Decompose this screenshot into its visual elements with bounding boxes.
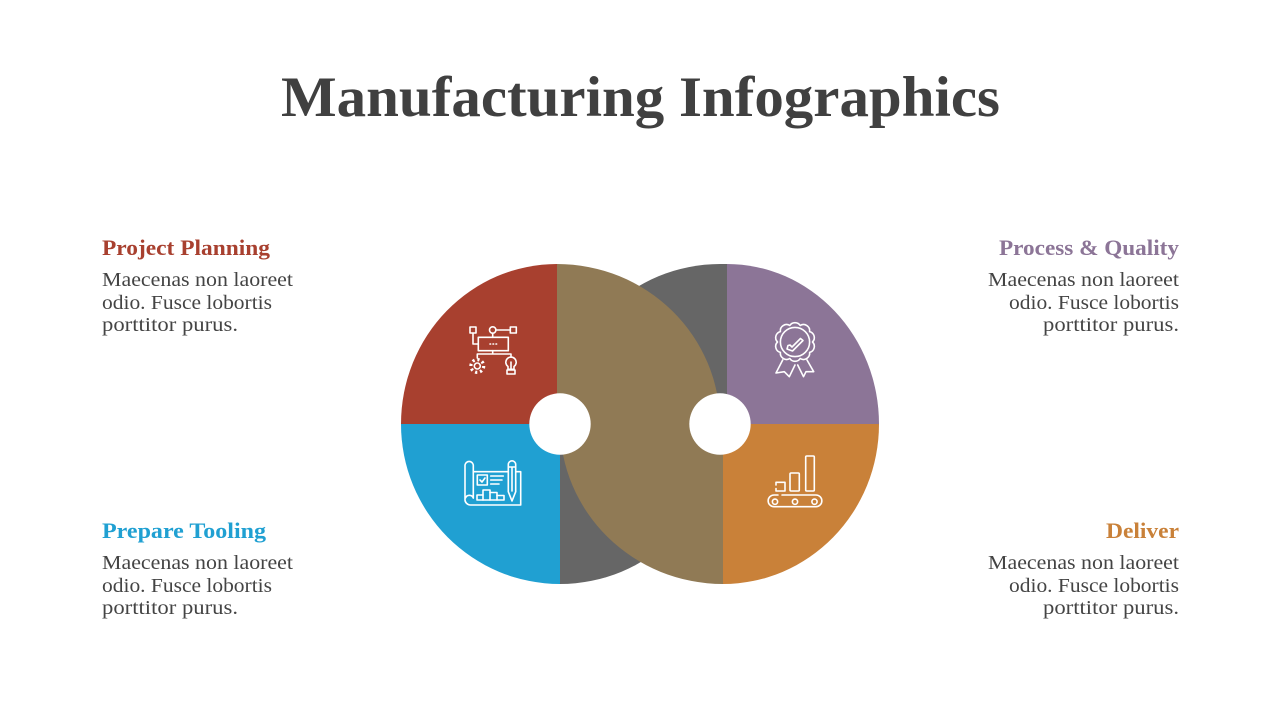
text block: Deliver xyxy=(988,518,1179,619)
segment: red xyxy=(401,264,557,424)
body: Process & Quality xyxy=(988,269,1179,336)
segment: orange xyxy=(723,424,879,584)
body: Deliver: Maecenas non laoreet xyxy=(988,552,1179,574)
text block: Prepare Tooling xyxy=(102,518,293,619)
heading: Prepare Tooling: Prepare Tooling xyxy=(102,518,266,543)
body: Prepare Tooling: porttitor purus. xyxy=(102,597,238,619)
body: Prepare Tooling: Maecenas non laoreet xyxy=(102,552,293,574)
segment: purple xyxy=(727,264,879,424)
heading: Project Planning: Project Planning xyxy=(102,235,270,260)
interlocking circles diagram xyxy=(401,264,879,584)
segment: blue xyxy=(401,424,560,584)
segment: grey top xyxy=(560,264,727,424)
body: Project Planning: porttitor purus. xyxy=(102,314,238,336)
body: Project Planning: Maecenas non laoreet xyxy=(102,269,293,291)
title: Manufacturing Infographics xyxy=(281,66,1000,129)
icon: conveyor belt with bars xyxy=(768,456,822,507)
body: Prepare Tooling xyxy=(102,552,293,619)
icon: quality badge xyxy=(776,323,814,377)
segment: grey bottom xyxy=(560,424,720,584)
body: Process & Quality: odio. Fusce lobortis xyxy=(1009,292,1179,314)
text block: Project Planning xyxy=(102,235,293,336)
heading: Deliver: Deliver xyxy=(1106,518,1179,543)
icon: project planning flowchart xyxy=(470,327,516,374)
body: Deliver: porttitor purus. xyxy=(1043,597,1179,619)
body: Project Planning: odio. Fusce lobortis xyxy=(102,292,272,314)
body: Deliver: odio. Fusce lobortis xyxy=(1009,575,1179,597)
body: Prepare Tooling: odio. Fusce lobortis xyxy=(102,575,272,597)
icon: blueprint and pencil xyxy=(465,461,521,505)
body: Process & Quality: porttitor purus. xyxy=(1043,314,1179,336)
text block: Process & Quality xyxy=(988,235,1179,336)
right hub xyxy=(689,393,751,455)
heading: Process & Quality: Process & Quality xyxy=(999,235,1179,260)
body: Deliver xyxy=(988,552,1179,619)
segment: brown overlap xyxy=(557,264,723,584)
body: Process & Quality: Maecenas non laoreet xyxy=(988,269,1179,291)
body: Project Planning xyxy=(102,269,293,336)
left hub xyxy=(529,393,591,455)
